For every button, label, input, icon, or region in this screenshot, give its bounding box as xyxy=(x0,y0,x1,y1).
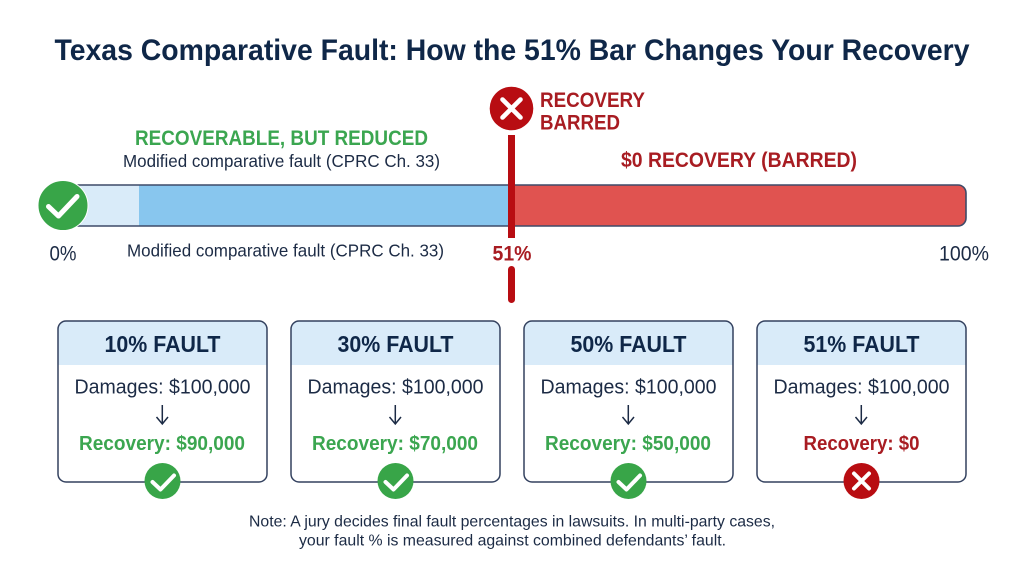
label: zero recovery heading: $0 RECOVERY (BARRED) xyxy=(621,149,857,172)
label: recovery barred: BARRED xyxy=(540,112,620,134)
footnote xyxy=(249,514,775,550)
panel: 51% fault: Recovery: $0 xyxy=(804,433,920,455)
icon: green check at 0% xyxy=(38,180,88,230)
panel: 50% fault: Recovery: $50,000 xyxy=(545,433,711,455)
panel: 10% fault xyxy=(58,321,267,499)
label: lower statute reference: Modified comparative fault (CPRC Ch. 33) xyxy=(127,240,444,260)
panel: 30% fault: 30% FAULT xyxy=(338,331,454,357)
panel: 51% fault: 51% FAULT xyxy=(804,331,920,357)
panel: 30% fault xyxy=(291,321,500,499)
label: 100%: 100% xyxy=(939,242,989,266)
panel: 51% fault xyxy=(757,321,966,499)
panel: 51% fault: Damages: $100,000 xyxy=(774,376,950,398)
label: 0%: 0% xyxy=(50,242,76,266)
panel: 50% fault xyxy=(524,321,733,499)
label: upper statute reference: Modified comparative fault (CPRC Ch. 33) xyxy=(123,151,440,171)
label: recoverable heading: RECOVERABLE, BUT REDUCED xyxy=(135,127,428,150)
panel: 10% fault: Recovery: $90,000 xyxy=(79,433,245,455)
footnote: your fault % is measured against combined defendants’ fault. xyxy=(299,532,726,550)
label: 51%: 51% xyxy=(492,242,532,266)
51% threshold marker line xyxy=(508,135,515,303)
title: Texas Comparative Fault: How the 51% Bar Changes Your Recovery xyxy=(54,34,970,67)
panel: 50% fault: 50% FAULT xyxy=(570,331,686,357)
label: recovery barred xyxy=(540,89,645,134)
icon: red X at threshold xyxy=(490,87,533,130)
panel: 30% fault: Damages: $100,000 xyxy=(308,376,484,398)
fault scale bar xyxy=(70,185,966,226)
footnote: Note: A jury decides final fault percentages in lawsuits. In multi-party cases, xyxy=(249,514,775,530)
panel: 10% fault: 10% FAULT xyxy=(104,331,220,357)
panel: 30% fault: Recovery: $70,000 xyxy=(312,433,478,455)
label: recovery barred: RECOVERY xyxy=(540,89,645,112)
panel: 10% fault: Damages: $100,000 xyxy=(74,376,250,398)
panel: 50% fault: Damages: $100,000 xyxy=(540,376,716,398)
